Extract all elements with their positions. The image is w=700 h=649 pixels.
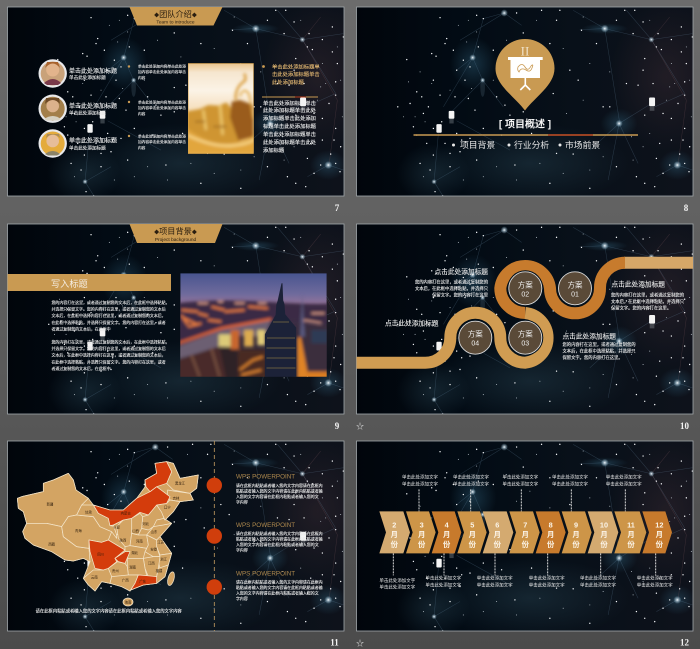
callout text: plan 02: 您的内容打在这里，或者通过复制您的 (415, 278, 488, 286)
timeline node 3 with text (207, 570, 323, 601)
callout text: plan 01 (611, 280, 685, 312)
section items (452, 139, 600, 150)
right column text: 此处添加标题 (272, 78, 304, 86)
middle text column: 单击此处添加内容单击此处添 (138, 64, 186, 68)
month labels: 份 (443, 540, 451, 549)
body paragraphs: 者通过复制您的文本后，在此框中 (52, 327, 111, 332)
team member 1: 单击此处添加标题 (69, 67, 117, 75)
timeline node 1 with text: WPS POWERPOINT (236, 474, 295, 480)
plan 04 (457, 320, 493, 356)
map of China by province: 西藏 (48, 541, 56, 546)
labels below chevrons: 单击此处添加文字 (580, 581, 616, 588)
labels below chevrons: 单击此处添加文字 (529, 581, 565, 588)
map of China by province: 湖北 (131, 550, 139, 555)
month labels: 5 (470, 520, 474, 529)
icon: location pin with presentation board: II (521, 44, 529, 58)
body paragraphs: 在此框中选择粘贴，并选择只保留文字。您的内容打在这里，或者 (52, 359, 166, 364)
timeline node 3 with text: 入您的文字内容请在此框内粘贴或者输入您的文 (236, 590, 319, 596)
page number 8: 8 (684, 203, 689, 213)
month labels: 份 (418, 540, 426, 549)
timeline node 3 with text: 字内容 (236, 596, 248, 601)
labels above chevrons: 单击此处添加文字 (606, 474, 642, 481)
month labels (391, 520, 664, 549)
plan 03: 03 (521, 340, 529, 348)
map of China by province: 黑龙江 (175, 481, 186, 486)
timeline node 1 with text: 入您的文字内容请在此框内粘贴或者输入您的文 (236, 494, 319, 499)
labels above chevrons: 单击此处添加文字 (552, 480, 588, 487)
timeline node 2 with text: 字内容 (236, 548, 248, 552)
labels above chevrons (402, 474, 642, 487)
callout text: plan 02: 点击此处添加标题 (434, 267, 488, 276)
labels below chevrons: 单击此处添加文字 (529, 575, 565, 582)
map of China by province: 河北 (142, 521, 150, 526)
right column text: 添加标题 (263, 146, 285, 154)
timeline node 1 with text: 字内容 (236, 500, 248, 504)
month labels: 份 (572, 540, 580, 549)
heading tab: project background: ◆项目背景◆ (154, 226, 197, 236)
page number 9: 9 (335, 421, 340, 431)
title banner (8, 274, 171, 291)
team member 3: 单击此处添加标题 (69, 136, 117, 144)
callout text: plan 02 (415, 267, 489, 298)
callout text: plan 03: 您的内容打在这里，或者通过复制您的 (562, 341, 636, 348)
body paragraphs: 文本后，在此框中选择内容打在这里，或者通过复制您的文本后， (52, 353, 166, 358)
map of China by province: 吉林 (173, 496, 180, 501)
labels below chevrons: 单击此处添加文字 (425, 575, 462, 582)
timeline node 2 with text (207, 522, 323, 552)
month labels: 8 (549, 520, 553, 529)
labels below chevrons: 单击此处添加文字 (580, 575, 616, 582)
body paragraphs: 您的内容打在这里，或者通过复制您的文本后，在此框中选择粘贴， (52, 339, 170, 344)
map of China by province: 青海 (75, 528, 82, 533)
body paragraphs: 并选择只保留文字。您的内容打在这里，或者通过复制您的文本后 (52, 346, 166, 351)
month labels: 份 (494, 540, 502, 549)
labels above chevrons: 单击此处添加文字 (402, 474, 438, 481)
callout text: plan 03: 保留文字。您的内容打在这里。 (562, 354, 623, 361)
icon: animation star marker: ☆ (356, 422, 364, 431)
month labels: 3 (420, 520, 424, 529)
divider line (414, 134, 638, 136)
plan 01 (557, 270, 593, 306)
month labels: 月 (418, 530, 425, 539)
team member 3: 单击此处添加标题 (69, 144, 106, 152)
month labels: 份 (627, 540, 635, 549)
callout text: plan 04: 点击此处添加标题 (385, 318, 439, 328)
month labels: 2 (392, 520, 396, 529)
middle text column: 内容 (138, 111, 146, 116)
middle text column: 加内容单击此处添加内容单击 (138, 139, 186, 144)
page number 7: 7 (335, 203, 340, 213)
month labels: 月 (572, 530, 580, 539)
labels above chevrons: 单击此处添加文字 (453, 474, 489, 481)
slide 10 background (356, 221, 700, 421)
middle text column (128, 64, 186, 150)
timeline node 2 with text: 粘贴或者输入您的文字内容请在此框内粘贴或者输 (236, 536, 323, 542)
team member 2: 单击此处添加标题 (69, 102, 117, 110)
body paragraphs: 并选择只保留文字。您的内容打在这里，或者通过复制您的文本后 (52, 306, 166, 312)
team member 2 (38, 94, 117, 123)
heading tab: project background: Project background (155, 237, 196, 243)
callout text: plan 01: 您的内容打在这里，或者通过复制您的 (611, 292, 684, 298)
middle text column: 单击此处添加内容单击此处添 (138, 134, 186, 138)
month labels: 份 (391, 540, 399, 549)
month labels: 9 (574, 520, 578, 529)
labels above chevrons: 单击此处添加文字 (552, 474, 588, 481)
month labels: 10 (600, 520, 608, 529)
right column text: 此处添加标题单击此处 (263, 106, 317, 114)
middle text column: 单击此处添加内容单击此处添 (138, 100, 186, 104)
middle text column: 加内容单击此处添加内容单击 (138, 105, 186, 110)
labels below chevrons: 单击此处添加文字 (637, 581, 673, 588)
month labels: 月 (600, 530, 608, 539)
map of China by province: 江苏 (157, 540, 165, 545)
timeline node 2 with text: 请在此框内粘贴或者输入您的文字内容请在此框内 (236, 531, 323, 536)
page number 10: 10 (680, 421, 690, 431)
plan 02: 方案 (518, 280, 533, 290)
callout text: plan 01: 保留文字。您的内容打在这里。 (611, 304, 671, 312)
section items: 市场前景 (565, 139, 600, 150)
map of China by province: 内蒙古 (121, 510, 131, 515)
timeline node 2 with text: 入您的文字内容请在此框内粘贴或者输入您的文 (236, 542, 319, 547)
plan 02 (507, 270, 543, 306)
map of China by province: 广东 (139, 579, 147, 584)
labels below chevrons: 单击此处添加文字 (477, 575, 513, 582)
map of China by province: 安徽 (150, 547, 158, 552)
map of China by province: 山东 (151, 529, 158, 534)
right column text: 击此处添加标题单击 (272, 70, 320, 78)
labels below chevrons: 单击此处添加文字 (379, 577, 416, 584)
labels below chevrons: 单击此处添加文字 (379, 584, 416, 591)
month labels: 月 (391, 530, 398, 539)
slide 12 background (356, 438, 700, 638)
body paragraphs: 文本后，在此框中选择内容打在这里，或者通过复制您的文本后， (52, 313, 166, 318)
labels below chevrons: 单击此处添加文字 (425, 581, 462, 588)
section items: 行业分析 (514, 139, 549, 150)
page number 12: 12 (680, 638, 690, 648)
photo: golden dragon city (185, 63, 257, 154)
icon: animation star marker: ☆ (356, 639, 364, 648)
body paragraphs: 者通过复制您的文本后，在此框中 (52, 366, 111, 371)
labels above chevrons: 单击此处添加文字 (502, 474, 539, 481)
slide 11 background (8, 438, 374, 638)
middle text column: 内容 (138, 75, 146, 80)
map of China by province: 湖南 (129, 564, 137, 569)
panel: slide 7 team introduction (7, 6, 344, 211)
callout text: plan 01: 点击此处添加标题 (612, 280, 665, 288)
month labels: 份 (547, 540, 555, 549)
middle text column: 内容 (138, 145, 146, 150)
slide 7 background (8, 4, 374, 203)
map of China by province: 河南 (136, 539, 143, 544)
labels above chevrons: 单击此处添加文字 (502, 480, 539, 487)
month labels: 11 (627, 520, 635, 529)
callout text: plan 02: 文本后，在此框中选择粘贴，并选择只 (415, 285, 489, 292)
map of China by province: 福建 (156, 568, 163, 573)
map of China by province: 甘肃 (85, 509, 92, 514)
timeline node 3 with text: 粘贴或者输入您的文字内容请在此框内粘贴或者输 (236, 585, 323, 590)
map caption: 请在此框内粘贴或者输入您的文字内容请在此框内粘贴或者输入您的文字内容 (36, 608, 182, 614)
slide 8 background (356, 4, 700, 203)
right column text (262, 62, 320, 154)
map of China by province: 四川 (97, 552, 104, 556)
right column text: 标题单击此处添加标题 (263, 122, 317, 130)
team member 2: 单击此处添加标题 (69, 110, 106, 116)
labels below chevrons: 单击此处添加文字 (477, 581, 513, 588)
heading tab: project background (130, 224, 222, 243)
callout text: plan 03: 文本后，在此框中选择粘贴，并选择只 (562, 348, 636, 354)
map of China by province: 广西 (122, 578, 129, 583)
title banner: 写入标题 (51, 278, 88, 289)
section items: 项目背景 (460, 139, 495, 150)
map of China by province: 新疆 (47, 501, 54, 506)
panel: slide 12 monthly timeline (356, 438, 700, 648)
callout text: plan 01: 文本后，在此框中选择粘贴，并选择只 (611, 298, 685, 305)
labels above chevrons: 单击此处添加文字 (402, 480, 438, 487)
plan 04: 方案 (468, 328, 483, 338)
labels above chevrons: 单击此处添加文字 (606, 480, 642, 487)
panel: slide 11 China map (8, 438, 374, 648)
month labels: 份 (522, 540, 530, 549)
plan 01: 01 (571, 292, 579, 298)
month labels: 4 (445, 520, 450, 529)
month labels: 月 (656, 530, 663, 539)
map of China by province: 山西 (132, 528, 140, 533)
body paragraphs (52, 300, 170, 371)
timeline node 1 with text: 粘贴或者输入您的文字内容请在此框内粘贴或者输 (236, 488, 323, 494)
map of China by province: 海南 (125, 599, 132, 604)
month labels: 月 (547, 530, 554, 539)
serpentine ribbon (356, 263, 693, 363)
body paragraphs: 在此框中选择粘贴，并选择只保留文字。您的内容打在这里，或者 (52, 320, 166, 325)
connector lines (393, 489, 656, 575)
month labels: 月 (522, 530, 529, 539)
timeline node 3 with text: WPS POWERPOINT (236, 570, 295, 578)
heading tab: team introduction: Team to introduce (156, 20, 195, 26)
timeline node 3 with text: 请在此框内粘贴或者输入您的文字内容请在此框内 (236, 580, 323, 584)
map of China by province (17, 462, 198, 606)
right column text: 此处添加标题单击此处 (263, 138, 317, 146)
plan 03: 方案 (518, 328, 533, 338)
photo: city skyline at dusk (175, 273, 331, 380)
right column text: 单击此处添加标题单击 (263, 99, 316, 107)
month labels: 月 (627, 530, 635, 539)
map of China by province: 浙江 (160, 556, 168, 561)
labels below chevrons: 单击此处添加文字 (637, 575, 673, 582)
panel: slide 8 section cover (356, 4, 700, 213)
map of China by province: 宁夏 (113, 524, 121, 529)
month labels: 份 (469, 540, 477, 549)
plan 03 (507, 320, 543, 356)
plan 02: 02 (521, 292, 529, 298)
labels below chevrons (379, 575, 673, 591)
month chevrons (379, 511, 672, 553)
month labels: 12 (655, 520, 663, 529)
right column text: 单击此处添加标题单 (272, 62, 320, 70)
timeline node 1 with text (207, 474, 323, 504)
labels above chevrons: 单击此处添加文字 (453, 480, 489, 487)
map of China by province: 贵州 (112, 568, 119, 573)
month labels: 月 (469, 530, 476, 539)
right column text: 添加标题单击此处添加 (263, 114, 316, 122)
month labels: 份 (656, 540, 664, 549)
map of China by province: 陕西 (120, 537, 127, 542)
month labels: 6 (495, 520, 499, 529)
panel: slide 10 serpentine plans (356, 221, 700, 431)
heading tab: team introduction (130, 7, 222, 26)
map of China by province: 辽宁 (164, 505, 171, 510)
heading tab: team introduction: ◆团队介绍◆ (154, 9, 197, 19)
callout text: plan 03: 点击此处添加标题 (562, 332, 616, 340)
callout text: plan 03 (562, 332, 636, 361)
team member 1 (38, 59, 117, 88)
plan 04: 04 (471, 340, 479, 348)
page number 11: 11 (330, 638, 339, 648)
middle text column: 加内容单击此处添加内容单击 (138, 69, 186, 74)
icon: location pin with presentation board (496, 39, 554, 110)
team member 1: 单击此处添加标题 (69, 74, 106, 81)
plan 01: 方案 (568, 280, 583, 290)
month labels: 7 (523, 520, 527, 529)
slide 9 background (8, 221, 374, 421)
panel: slide 9 project background (7, 224, 344, 429)
right column text: 单击此处添加标题单击 (263, 130, 316, 138)
map of China by province: 云南 (91, 575, 98, 580)
month labels: 月 (494, 530, 501, 539)
dashed timeline (213, 441, 215, 631)
team member 3 (38, 129, 117, 158)
month labels: 份 (600, 540, 608, 549)
timeline node 1 with text: 请在此框内粘贴或者输入您的文字内容请在此框内 (236, 483, 323, 488)
month labels: 月 (443, 530, 450, 539)
timeline node 2 with text: WPS POWERPOINT (236, 522, 295, 529)
map of China by province: 江西 (148, 560, 155, 565)
callout text: plan 02: 保留文字。您的内容打在这里 (432, 292, 489, 298)
body paragraphs: 您的内容打在这里，或者通过复制您的文本后，在此框中选择粘贴， (52, 300, 170, 305)
section title: [ 项目概述 ] (499, 118, 551, 130)
